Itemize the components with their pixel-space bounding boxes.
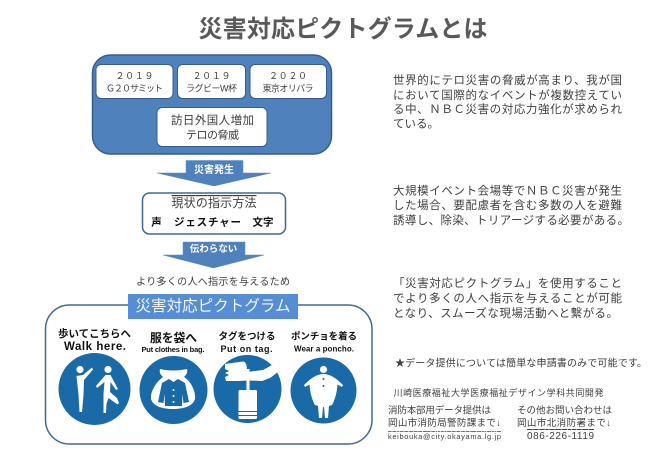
- event box: G20 summit: ２０１９: [116, 71, 154, 81]
- contact: fire headquarters data: keibouka@city.okayama.lg.jp: [388, 432, 501, 441]
- text block: background: る中、ＮＢＣ災害の対応力強化が求められ: [393, 102, 622, 116]
- contact: other inquiries: 086-226-1119: [527, 431, 594, 442]
- box: current instruction methods: 現状の指示方法: [172, 195, 256, 210]
- text block: background: において国際的なイベントが複数控えてい: [393, 88, 622, 102]
- panel: upcoming events: [92, 55, 332, 154]
- pictogram: put on tag: Put on tag.: [220, 344, 272, 354]
- arrow: not communicated: [163, 242, 264, 268]
- box: visitors and terror threat: テロの脅威: [186, 128, 239, 142]
- contact: fire headquarters data: 消防本部用データ提供は: [388, 404, 491, 416]
- box: current instruction methods: ジェスチャー: [174, 216, 241, 228]
- contact: other inquiries: 岡山市北消防署まで↓: [517, 417, 611, 429]
- pictogram: walk here: Walk here.: [64, 341, 126, 353]
- pictogram: wear a poncho: Wear a poncho.: [294, 344, 354, 354]
- panel: disaster pictograms: [46, 294, 372, 444]
- banner heading: [128, 294, 298, 319]
- contact: other inquiries: [517, 404, 612, 442]
- text block: large events: した場合、要配慮者を含む多数の人を避難: [393, 198, 622, 212]
- box: visitors and terror threat: [157, 108, 267, 146]
- arrow: not communicated: 伝わらない: [190, 243, 237, 255]
- credit: joint development: 川崎医療福祉大学医療福祉デザイン学科共同開発: [394, 387, 604, 398]
- event box: rugby world cup: ２０１９: [192, 71, 230, 81]
- pictogram: put on tag: タグをつける: [218, 330, 276, 342]
- contact: fire headquarters data: [388, 404, 501, 441]
- event box: Tokyo Olympics: 東京オリパラ: [262, 82, 314, 94]
- contact: fire headquarters data: 岡山市消防局警防課まで↓: [388, 417, 501, 429]
- text block: background: [393, 73, 622, 130]
- pictogram: put clothes in bag: Put clothes in bag.: [142, 345, 204, 354]
- caption above pictogram panel: より多くの人へ指示を与えるため: [136, 275, 290, 288]
- title: 災害対応ピクトグラムとは: [198, 15, 488, 43]
- event box: G20 summit: Ｇ２０サミット: [106, 84, 163, 94]
- event box: rugby world cup: [178, 64, 246, 98]
- pictogram: wear a poncho: ポンチョを着る: [291, 330, 357, 342]
- note: data provision: ★データ提供については簡単な申請書のみで可能です。: [395, 356, 647, 370]
- pictogram: wear a poncho: [290, 330, 357, 424]
- event box: G20 summit: [96, 64, 173, 98]
- text block: background: 世界的にテロ災害の脅威が高まり、我が国: [393, 73, 622, 87]
- arrow: disaster occurs: 災害発生: [194, 163, 234, 176]
- text block: benefit of pictograms: でより多くの人へ指示を与えることが可能: [393, 291, 622, 305]
- text block: benefit of pictograms: 「災害対応ピクトグラム」を使用すること: [393, 276, 622, 290]
- banner heading: 災害対応ピクトグラム: [136, 297, 290, 315]
- box: visitors and terror threat: 訪日外国人増加: [171, 114, 254, 127]
- event box: Tokyo Olympics: ２０２０: [269, 71, 307, 81]
- pictogram: put clothes in bag: 服を袋へ: [150, 331, 197, 345]
- box: current instruction methods: [142, 193, 286, 234]
- box: current instruction methods: 文字: [252, 216, 274, 228]
- pictogram: walk here: [58, 327, 132, 425]
- arrow: disaster occurs: [157, 160, 271, 186]
- event box: Tokyo Olympics: [250, 64, 326, 98]
- pictogram: walk here: 歩いてこちらへ: [58, 327, 132, 340]
- text block: large events: 誘導し、除染、トリアージする必要がある。: [393, 213, 629, 227]
- pictogram: put on tag: [214, 330, 282, 423]
- pictogram: put clothes in bag: [140, 331, 208, 424]
- text block: benefit of pictograms: となり、スムーズな現場活動へと繫がる。: [393, 306, 618, 320]
- text block: large events: [393, 184, 629, 227]
- text block: large events: 大規模イベント会場等でＮＢＣ災害が発生: [393, 184, 622, 198]
- box: current instruction methods: 声: [151, 216, 162, 228]
- text block: background: ている。: [393, 118, 439, 130]
- text block: benefit of pictograms: [393, 276, 622, 320]
- event box: rugby world cup: ラグビーW杯: [186, 82, 237, 94]
- contact: other inquiries: その他お問い合わせは: [517, 404, 612, 416]
